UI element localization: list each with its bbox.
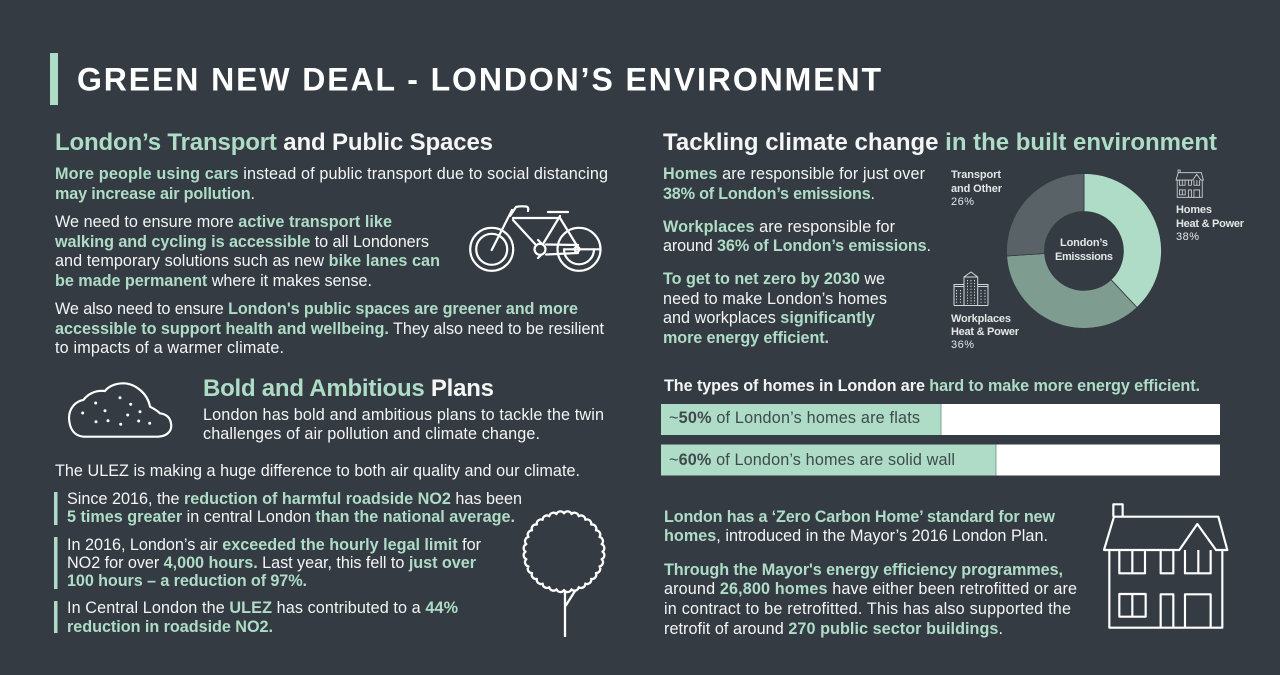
text block: net zero: To get to net zero by 2030 we — [663, 270, 885, 288]
bar: solid wall 60%: ~60% of London’s homes are solid wall — [669, 451, 955, 469]
text block: public spaces: to impacts of a warmer climate. — [55, 339, 284, 357]
text block: cars and air pollution: More people using cars instead of public transport due to social distancing — [55, 165, 608, 183]
segment: homes 38% — [1084, 174, 1161, 308]
title: GREEN NEW DEAL - LONDON’S ENVIRONMENT — [77, 62, 881, 98]
text block: retrofit programmes: in contract to be retrofitted. This has also supported the — [664, 600, 1071, 618]
text block: public spaces — [55, 300, 604, 357]
text block: zero carbon home: homes, introduced in the Mayor’s 2016 London Plan. — [664, 527, 1048, 545]
icon: small house — [1176, 170, 1203, 197]
icon: pollution cloud — [69, 383, 171, 437]
text block: net zero: and workplaces significantly — [663, 309, 875, 327]
title — [50, 53, 881, 105]
callout: ULEZ 44 percent — [54, 599, 458, 636]
callout: legal limit hours: NO2 for over 4,000 hours. Last year, this fell to just over — [67, 554, 477, 572]
text block: active transport — [54, 213, 440, 290]
panel: climate change in the built environment — [661, 129, 1245, 638]
callout: NO2 reduction: 5 times greater in central London than the national average. — [67, 508, 515, 526]
text block: workplaces emissions: Workplaces are responsible for — [663, 218, 896, 236]
panel: bold and ambitious plans — [54, 375, 604, 637]
icon: bicycle — [470, 206, 600, 271]
text block: net zero: need to make London’s homes — [663, 290, 887, 308]
text block: zero carbon home — [664, 508, 1055, 545]
donut centre label: London’s — [1060, 237, 1108, 249]
text block: active transport: and temporary solutions such as new bike lanes can — [55, 252, 440, 270]
label: transport and other: Transport — [951, 169, 1001, 181]
text block: retrofit programmes: retrofit of around 270 public sector buildings. — [664, 620, 1003, 638]
text block: workplaces emissions: around 36% of London’s emissions. — [663, 237, 931, 255]
text block: cars and air pollution: may increase air pollution. — [55, 185, 255, 203]
segment: workplaces 36% — [1007, 254, 1137, 328]
donut centre label: Emisssions — [1055, 251, 1113, 263]
text block: homes emissions: 38% of London’s emissions. — [663, 185, 875, 203]
text block: zero carbon home: London has a ‘Zero Carbon Home’ standard for new — [664, 508, 1055, 526]
text block: homes emissions — [663, 165, 926, 203]
text block: public spaces: accessible to support health and wellbeing. They also need to be resilient — [55, 320, 604, 338]
callout: NO2 reduction: Since 2016, the reduction of harmful roadside NO2 has been — [67, 490, 522, 508]
text block: retrofit programmes: around 26,800 homes have either been retrofitted or are — [664, 580, 1077, 598]
text block: active transport: be made permanent where it makes sense. — [55, 272, 372, 290]
text block: retrofit programmes: Through the Mayor's energy efficiency programmes, — [664, 561, 1063, 579]
callout: ULEZ 44 percent: reduction in roadside NO2. — [67, 618, 273, 636]
text block: net zero — [663, 270, 887, 347]
label: workplaces heat and power: 36% — [951, 339, 974, 351]
heading: bold and ambitious plans: Bold and Ambitious Plans — [203, 375, 494, 402]
text block: workplaces emissions — [663, 218, 931, 255]
text block: cars and air pollution — [55, 165, 608, 203]
bar: flats 50% — [661, 404, 1220, 435]
label: workplaces heat and power — [951, 313, 1020, 351]
text block: active transport: We need to ensure more active transport like — [55, 213, 392, 231]
bar: solid wall 60% — [661, 444, 1220, 476]
label: homes heat and power: Heat & Power — [1176, 218, 1245, 230]
label: transport and other: and Other — [951, 183, 1003, 195]
label: homes heat and power — [1176, 204, 1245, 243]
icon: large house — [1104, 504, 1227, 628]
callout: legal limit hours: In 2016, London’s air exceeded the hourly legal limit for — [67, 536, 482, 554]
donut centre label — [1055, 237, 1113, 263]
donut chart: London's emissions — [1007, 174, 1161, 328]
text block: ambitious plans intro: challenges of air pollution and climate change. — [203, 425, 540, 443]
text block: ULEZ statement: The ULEZ is making a huge difference to both air quality and our climate. — [55, 462, 580, 480]
label: transport and other — [951, 169, 1003, 208]
text block: public spaces: We also need to ensure London's public spaces are greener and more — [55, 300, 578, 318]
label: transport and other: 26% — [951, 196, 974, 208]
text block: net zero: more energy efficient. — [663, 329, 829, 347]
text block: ambitious plans intro — [203, 406, 604, 443]
heading: types of homes: The types of homes in London are hard to make more energy efficient. — [664, 377, 1200, 395]
icon: tree — [524, 511, 604, 637]
label: workplaces heat and power: Heat & Power — [951, 326, 1020, 338]
segment: transport 26% — [1007, 174, 1084, 256]
heading: transport: London’s Transport and Public Spaces — [55, 129, 493, 156]
bar: flats 50%: ~50% of London’s homes are flats — [669, 409, 920, 427]
callout: legal limit hours: 100 hours – a reduction of 97%. — [67, 572, 307, 590]
icon: office buildings — [954, 272, 988, 306]
label: homes heat and power: Homes — [1176, 204, 1212, 216]
label: workplaces heat and power: Workplaces — [951, 313, 1011, 325]
callout: ULEZ 44 percent: In Central London the ULEZ has contributed to a 44% — [67, 599, 458, 617]
text block: retrofit programmes — [664, 561, 1077, 638]
text block: ambitious plans intro: London has bold and ambitious plans to tackle the twin — [203, 406, 604, 424]
callout: NO2 reduction — [54, 490, 522, 526]
text block: homes emissions: Homes are responsible for just over — [663, 165, 926, 183]
panel: London's transport and public spaces — [54, 129, 608, 357]
label: homes heat and power: 38% — [1176, 231, 1199, 243]
heading: built environment: Tackling climate change in the built environment — [663, 129, 1217, 156]
callout: legal limit hours — [54, 536, 482, 590]
text block: active transport: walking and cycling is accessible to all Londoners — [54, 233, 429, 251]
